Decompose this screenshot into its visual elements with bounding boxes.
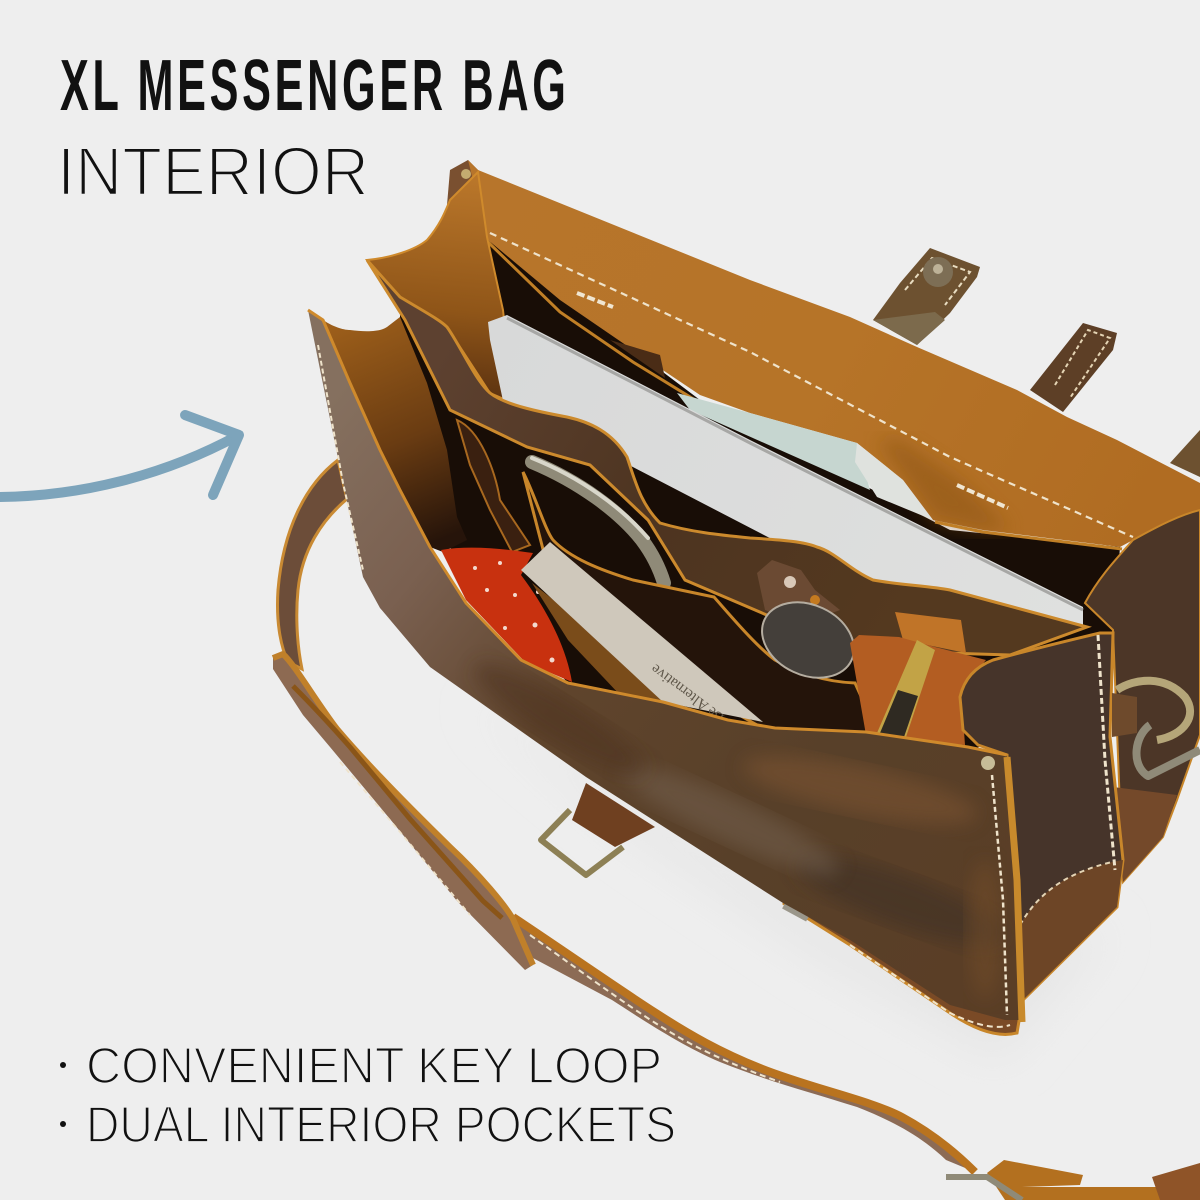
lower pocket	[523, 472, 880, 738]
phone	[532, 458, 664, 583]
ground shadow	[470, 700, 1110, 1060]
book: Be Alternative	[648, 660, 727, 726]
title: INTERIOR	[57, 133, 369, 210]
rear strap tabs and buckles	[873, 248, 1200, 477]
middle pocket panel	[367, 260, 1087, 655]
title	[57, 45, 566, 210]
title: XL MESSENGER BAG	[60, 45, 566, 126]
feature list: DUAL INTERIOR POCKETS	[86, 1096, 676, 1153]
back rivet	[447, 160, 480, 205]
bottom fold of bag	[783, 903, 1023, 1034]
interior base	[400, 240, 1120, 750]
back gusset	[367, 172, 513, 403]
key loop	[457, 420, 530, 552]
glasses	[750, 560, 866, 692]
red pouch	[441, 548, 572, 682]
wallet	[850, 612, 986, 745]
ring hardware	[1112, 681, 1200, 776]
feature list: CONVENIENT KEY LOOP	[86, 1037, 662, 1094]
laptop	[488, 315, 1083, 628]
strap buckle	[946, 1160, 1200, 1200]
right exterior side	[1085, 510, 1200, 882]
front buckle tab	[541, 783, 808, 918]
arrow	[0, 415, 239, 497]
feature list	[60, 1037, 676, 1153]
front panel	[308, 310, 1022, 1027]
side suede gusset	[323, 317, 467, 552]
folded strap end	[273, 654, 533, 970]
long strap	[513, 917, 975, 1172]
book	[521, 542, 763, 726]
strap behind the bag	[277, 460, 347, 669]
right gusset	[960, 633, 1123, 1000]
notebook	[677, 393, 933, 520]
suede flap	[468, 160, 1200, 549]
